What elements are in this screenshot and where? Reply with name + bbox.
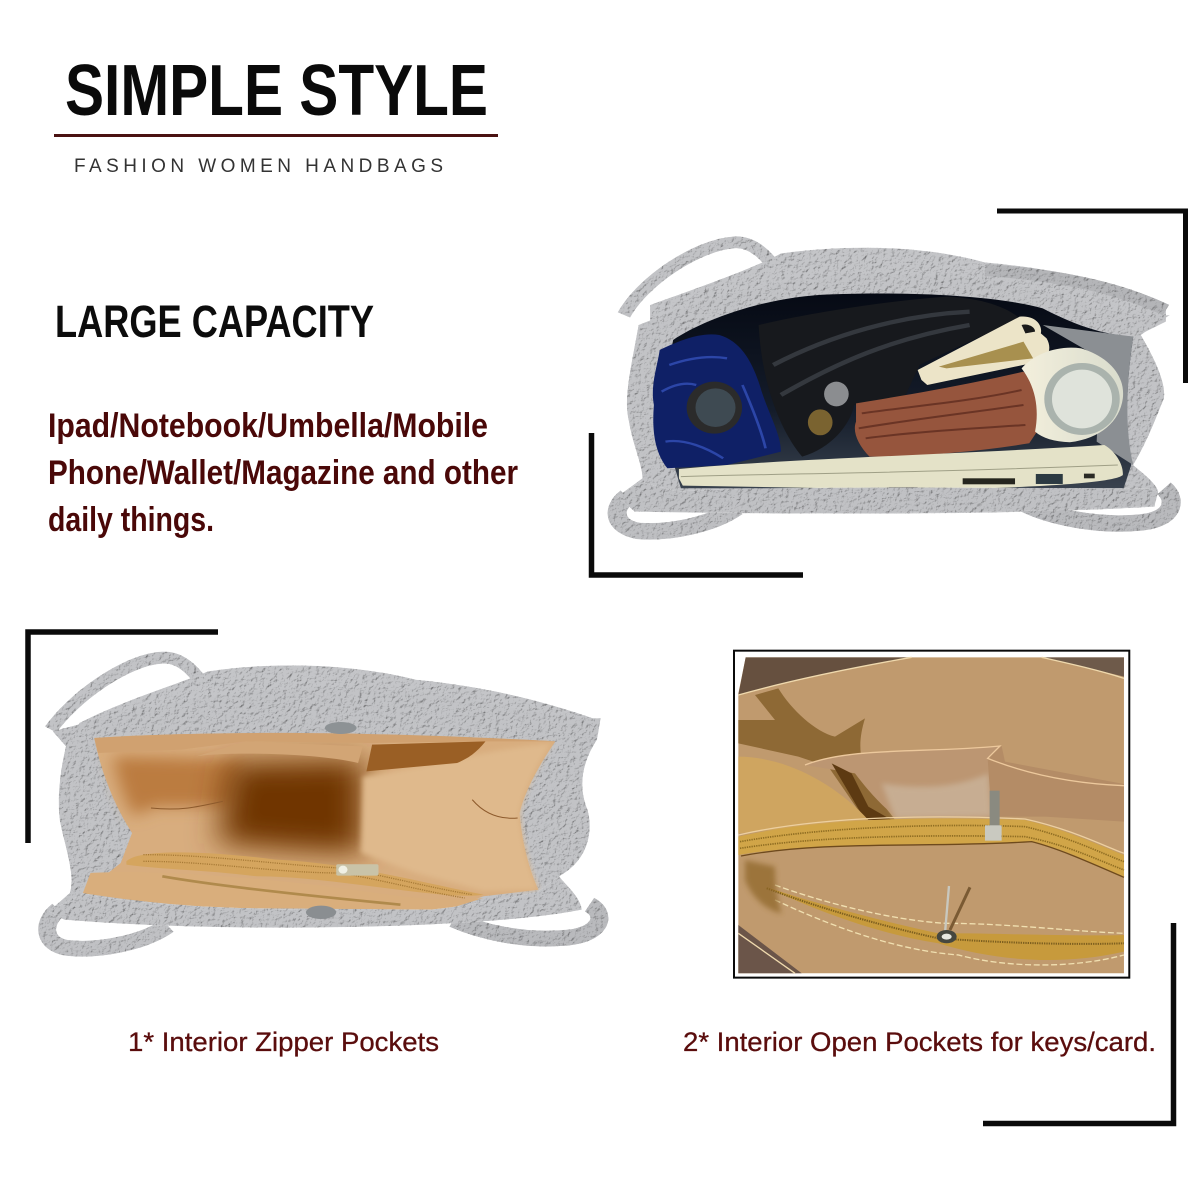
back clasp: [325, 722, 357, 734]
side shadow: [745, 860, 782, 913]
leather corner top right: [1042, 657, 1124, 677]
heading: large capacity: LARGE CAPACITY: [55, 296, 374, 347]
upper zip pull: [985, 791, 1002, 841]
light fold in pocket: [882, 773, 992, 818]
pocket edge: [805, 746, 1124, 786]
caption: open pockets: 2* Interior Open Pockets for keys/card.: [683, 1027, 1156, 1057]
open pocket: [366, 741, 485, 771]
front silver rim: [617, 482, 1158, 513]
photo: close-up of interior pockets: [734, 651, 1129, 978]
stitched edge: [738, 657, 1124, 973]
umbrella: [653, 334, 781, 468]
zipper band: [126, 852, 484, 898]
subtitle: FASHION WOMEN HANDBAGS: [74, 156, 443, 177]
photo: empty bag showing tan lining: [47, 658, 601, 949]
lower zipper: [162, 876, 400, 905]
leather corner bottom left: [738, 925, 802, 973]
text block: capacity description: daily things.: [48, 501, 214, 539]
laptop: [679, 445, 1123, 496]
grey lining on the right: [1043, 325, 1133, 465]
left wall shading: [113, 756, 245, 816]
upper zipper: [738, 817, 1124, 877]
text block: capacity description: [48, 407, 518, 539]
corner bracket: lower left: [28, 632, 218, 843]
corner bracket: lower right: [983, 923, 1174, 1124]
title underline: [54, 134, 498, 137]
silver bag shell: [617, 242, 1171, 531]
dark back of bag: [219, 760, 363, 853]
white bottle: [1022, 348, 1123, 442]
photo: bag filled with everyday items: [617, 242, 1171, 531]
silver bag shell: [47, 658, 601, 949]
corner bracket: bag bottom left: [592, 433, 803, 575]
lower pocket: [83, 872, 484, 910]
lining background: [738, 657, 1124, 973]
right side lining folds: [361, 743, 552, 891]
text block: capacity description: Phone/Wallet/Magazine and other: [48, 454, 518, 492]
bag interior cavity: [669, 293, 1133, 488]
tan interior: [83, 733, 555, 910]
corner bracket: top right: [997, 211, 1186, 383]
leather corner top left: [738, 657, 912, 695]
dark shadow in pocket: [832, 763, 892, 820]
pocket edge: [196, 741, 363, 763]
left yellow flap: [738, 757, 868, 833]
black mesh pouch: [759, 297, 1020, 457]
shadow of handle: [738, 688, 895, 820]
caption: zipper pockets: 1* Interior Zipper Pockets: [128, 1027, 439, 1057]
front clasp: [306, 906, 336, 919]
front silver rim: [49, 876, 582, 928]
upper rim lining: [94, 733, 555, 753]
lower zipper: [765, 885, 1124, 965]
lower zip pull: [937, 886, 970, 943]
fold lines: [151, 800, 518, 818]
text block: capacity description: Ipad/Notebook/Umbella/Mobile: [48, 407, 488, 445]
right pocket panel: [988, 746, 1124, 822]
left pocket panel: [805, 746, 1000, 818]
brown wallet: [855, 372, 1038, 457]
cream wallet: [918, 316, 1049, 385]
title: SIMPLE STYLE: SIMPLE STYLE: [65, 51, 488, 131]
photo frame: [734, 651, 1129, 978]
